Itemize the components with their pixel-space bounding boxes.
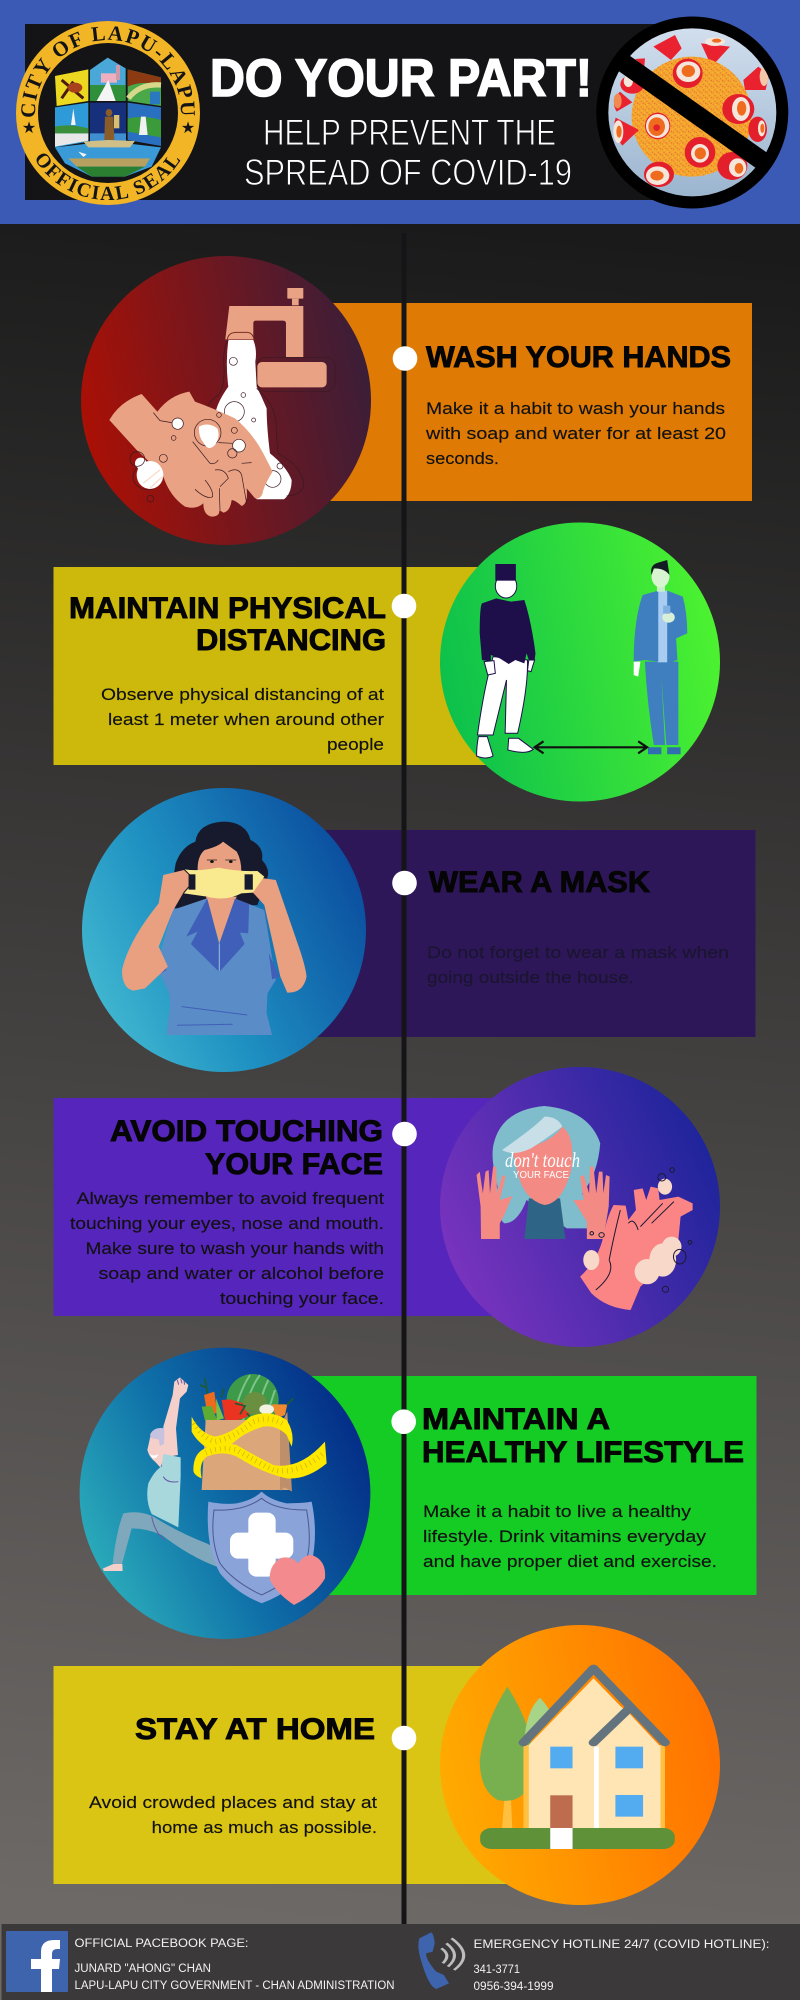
body text: Always remember to avoid frequent — [76, 1189, 384, 1208]
title — [422, 1403, 744, 1469]
body text: home as much as possible. — [152, 1818, 377, 1837]
body text: Make it a habit to live a healthy — [423, 1502, 692, 1521]
footer bar — [2, 1924, 800, 2000]
body text: touching your eyes, nose and mouth. — [70, 1214, 384, 1233]
icon: city seal: ★ — [181, 120, 195, 137]
card — [300, 830, 756, 1037]
body text — [427, 943, 729, 987]
body text: Make it a habit to wash your hands — [426, 399, 725, 418]
panel: maintain a healthy lifestyle — [80, 1348, 757, 1639]
panel: avoid touching your face — [54, 1067, 720, 1347]
card — [300, 1376, 756, 1595]
panel: maintain physical distancing — [54, 522, 720, 802]
panel: wear a mask — [82, 788, 756, 1072]
title — [110, 1115, 383, 1181]
panel: stay at home — [54, 1625, 720, 1905]
hotline text: EMERGENCY HOTLINE 24/7 (COVID HOTLINE): — [474, 1939, 770, 1951]
body text — [89, 1793, 377, 1837]
heading: do your part: DO YOUR PART! — [210, 49, 592, 108]
body text: touching your face. — [220, 1289, 384, 1308]
facebook page text: LAPU-LAPU CITY GOVERNMENT - CHAN ADMINISTRATION — [74, 1980, 394, 1992]
body text: Observe physical distancing of at — [101, 685, 384, 704]
icon: city seal — [16, 21, 200, 205]
panel: wash your hands — [81, 256, 752, 545]
card — [54, 1666, 524, 1884]
subheading: SPREAD OF COVID-19 — [244, 152, 572, 193]
icon: no-virus sign — [596, 16, 788, 208]
timeline: centre line and dots — [391, 233, 417, 1925]
title: AVOID TOUCHING — [110, 1115, 383, 1148]
body text — [101, 685, 384, 754]
subheading: HELP PREVENT THE — [263, 112, 556, 153]
body text: seconds. — [426, 449, 499, 468]
hotline text: 341-3771 — [474, 1964, 520, 1976]
body text — [425, 399, 726, 468]
hotline text — [474, 1939, 770, 1993]
circle illustration: hand washing — [81, 256, 371, 545]
body text: least 1 meter when around other — [108, 710, 384, 729]
title: MAINTAIN PHYSICAL — [69, 592, 386, 625]
circle illustration: house — [440, 1625, 720, 1905]
icon: city seal: OFFICIAL SEAL — [36, 154, 180, 200]
card — [300, 303, 752, 501]
title: STAY AT HOME — [135, 1713, 375, 1746]
body text: Avoid crowded places and stay at — [89, 1793, 377, 1812]
header banner — [0, 0, 800, 224]
body text — [423, 1502, 717, 1571]
title: WASH YOUR HANDS — [426, 341, 731, 374]
icon: city seal: CITY OF LAPU-LAPU — [21, 26, 195, 117]
body text: soap and water or alcohol before — [98, 1264, 384, 1283]
circle illustration: two people apart — [440, 522, 720, 802]
icon: facebook — [6, 1931, 68, 1992]
body text: Make sure to wash your hands with — [86, 1239, 384, 1258]
circle illustration: do not touch face: don't touch — [505, 1148, 580, 1172]
title: YOUR FACE — [205, 1148, 383, 1181]
circle illustration: do not touch face: YOUR FACE — [513, 1170, 569, 1181]
subheading — [244, 112, 572, 193]
body text: and have proper diet and exercise. — [423, 1552, 717, 1571]
body text: with soap and water for at least 20 — [425, 424, 726, 443]
icon: phone — [418, 1932, 464, 1989]
card — [54, 1098, 504, 1316]
circle illustration: exercise, food and shield — [80, 1348, 370, 1639]
title: HEALTHY LIFESTYLE — [422, 1436, 744, 1469]
body text: lifestyle. Drink vitamins everyday — [423, 1527, 707, 1546]
circle illustration: do not touch face — [440, 1067, 720, 1347]
title — [69, 592, 386, 657]
body text: people — [327, 735, 384, 754]
facebook page text — [74, 1938, 394, 1992]
body text: going outside the house. — [427, 968, 634, 987]
circle illustration: woman with mask — [82, 788, 366, 1072]
body text: Do not forget to wear a mask when — [427, 943, 729, 962]
facebook page text: OFFICIAL PACEBOOK PAGE: — [74, 1938, 249, 1950]
facebook page text: JUNARD "AHONG" CHAN — [74, 1963, 211, 1975]
body text — [70, 1189, 384, 1308]
icon: city seal: ★ — [22, 120, 36, 137]
card — [54, 567, 504, 765]
title: DISTANCING — [196, 624, 386, 657]
hotline text: 0956-394-1999 — [474, 1981, 554, 1993]
title: WEAR A MASK — [429, 866, 650, 899]
title: MAINTAIN A — [422, 1403, 610, 1436]
